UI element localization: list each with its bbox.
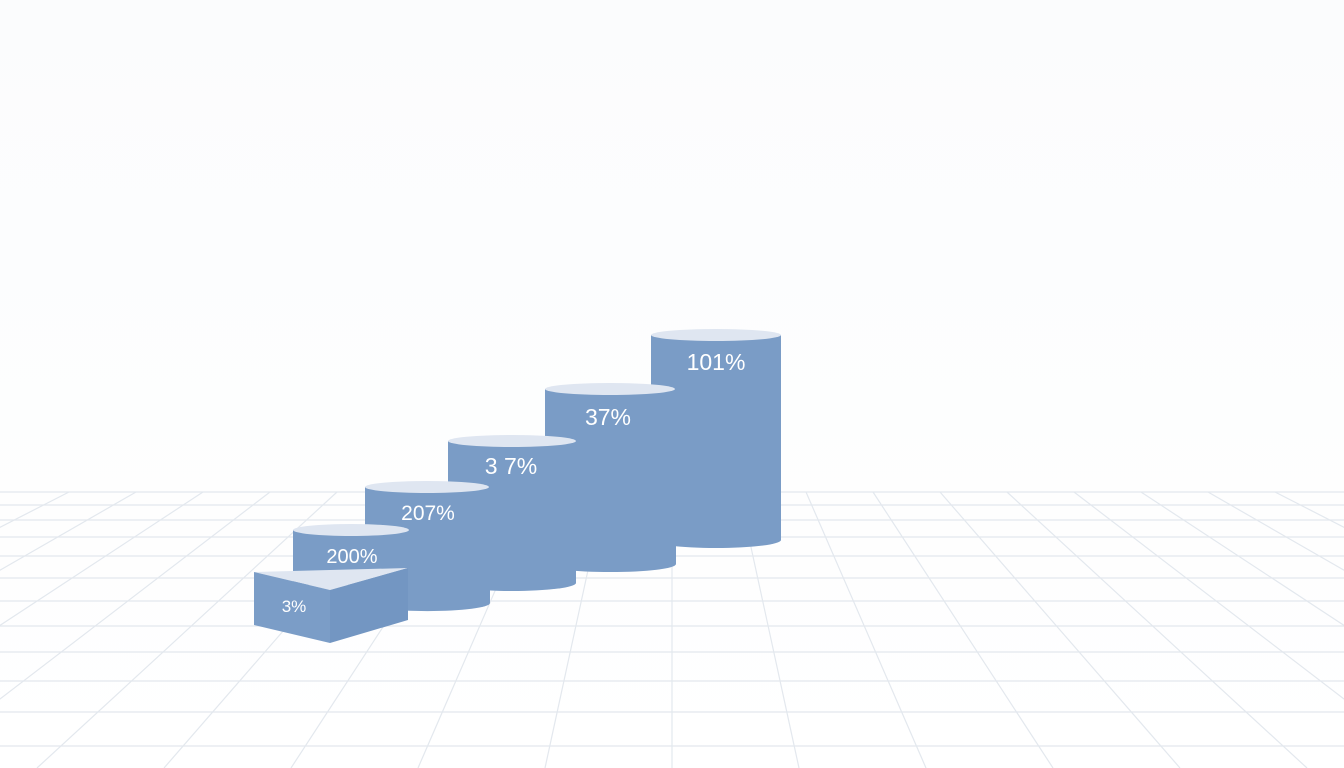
cylinder 200% xyxy=(293,524,410,585)
bar chart xyxy=(254,329,781,643)
cylinder 101% xyxy=(651,329,781,548)
cylinder 200%: 200% xyxy=(326,546,378,568)
box 3% xyxy=(254,568,408,643)
cylinder 3 7% xyxy=(448,435,576,591)
cylinder 37%: 37% xyxy=(585,404,631,430)
cylinder 37% xyxy=(545,383,676,572)
cylinder 3 7%: 3 7% xyxy=(485,453,537,479)
cylinder 207%: 207% xyxy=(401,502,455,525)
box 3%: 3% xyxy=(282,597,306,616)
cylinder 207% xyxy=(365,481,490,611)
cylinder 101%: 101% xyxy=(687,349,745,375)
